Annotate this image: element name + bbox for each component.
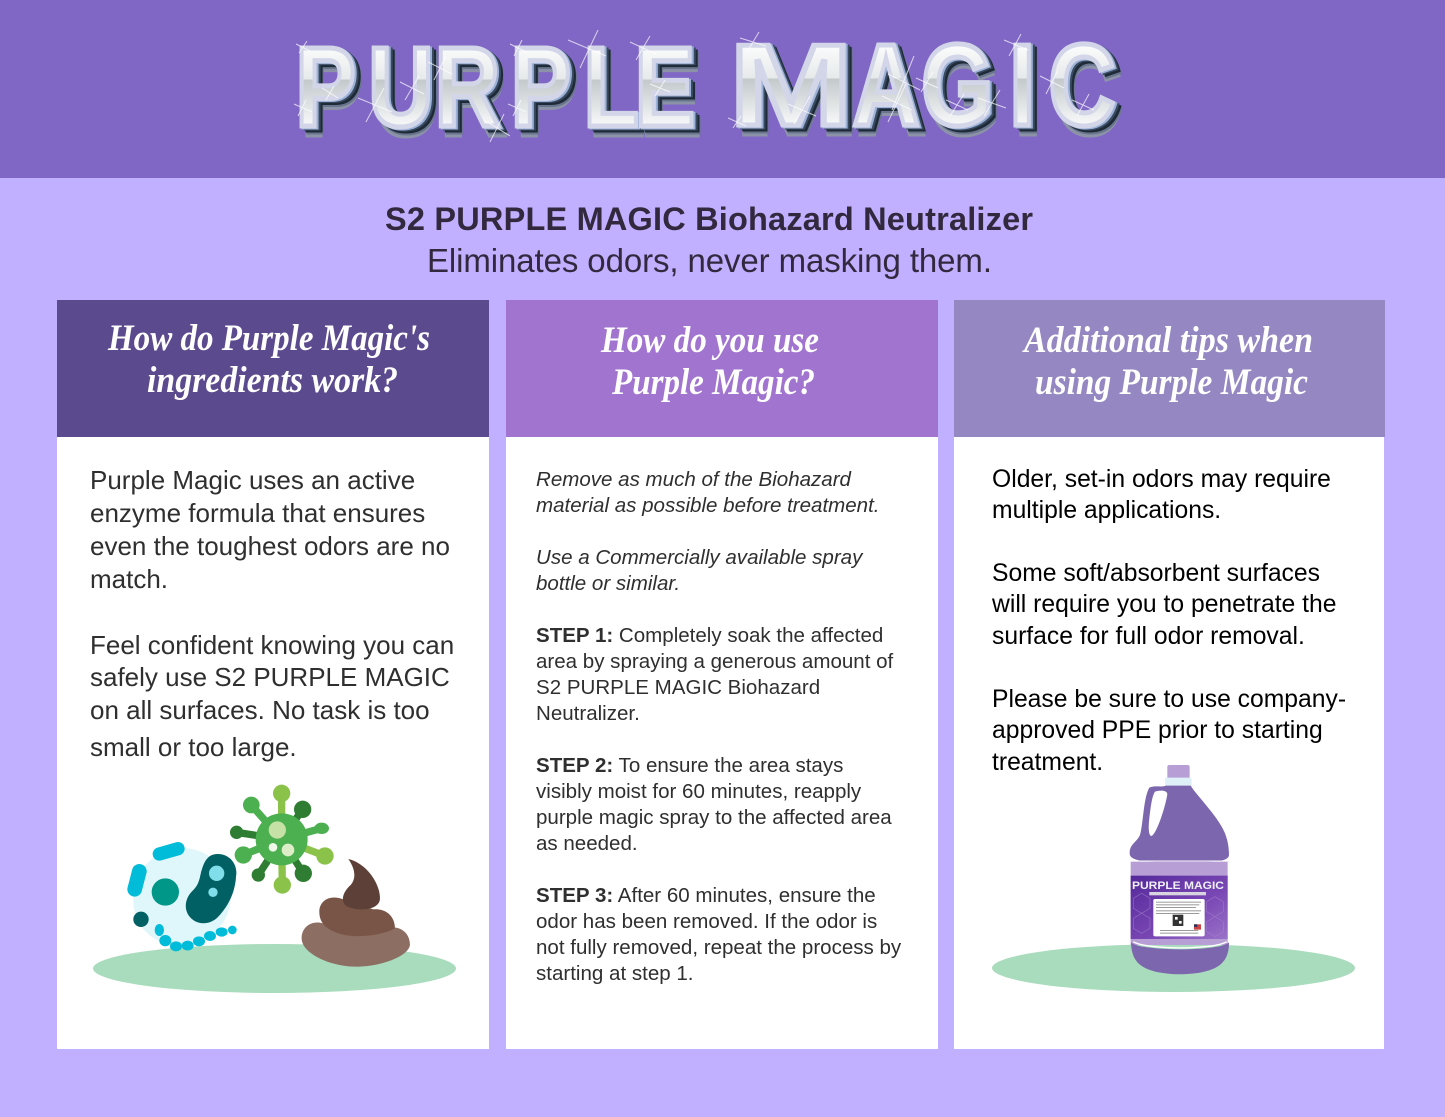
pre-treatment notes: Remove as much of the Biohazard xyxy=(536,468,852,491)
panel: additional tips xyxy=(954,300,1385,1049)
step 1: area by spraying a generous amount of xyxy=(536,650,894,673)
icon: spray jug xyxy=(1130,765,1229,974)
step 1: STEP 1: Completely soak the affected xyxy=(536,624,883,647)
tips text: will require you to penetrate the xyxy=(991,591,1336,618)
panel header xyxy=(506,300,938,437)
tips text: surface for full odor removal. xyxy=(992,623,1305,650)
body text: safely use S2 PURPLE MAGIC xyxy=(90,662,450,692)
tips text: Some soft/absorbent surfaces xyxy=(992,560,1320,587)
body text: small or too large. xyxy=(90,732,297,762)
title sparkles xyxy=(294,30,1094,142)
panel: how the ingredients work xyxy=(57,300,489,1049)
step 3 xyxy=(536,884,902,985)
panel header: Purple Magic? xyxy=(611,362,815,403)
icon: virus xyxy=(230,785,334,894)
body text: on all surfaces. No task is too xyxy=(90,695,430,725)
body text: match. xyxy=(90,564,168,594)
pre-treatment notes: bottle or similar. xyxy=(536,572,680,595)
icon: bacteria cell xyxy=(133,848,237,951)
panel header xyxy=(954,300,1385,437)
title: PURPLE MAGIC chrome lettering: M xyxy=(730,21,852,150)
step 3: not fully removed, repeat the process by xyxy=(536,936,902,959)
panel: how to use xyxy=(506,300,938,1049)
step 3: starting at step 1. xyxy=(536,962,694,985)
tips text: multiple applications. xyxy=(992,497,1221,524)
pre-treatment notes: Use a Commercially available spray xyxy=(536,546,864,569)
pre-treatment notes xyxy=(536,468,880,595)
panel header: using Purple Magic xyxy=(1035,362,1308,403)
tips text: Older, set-in odors may require xyxy=(992,466,1331,493)
step 1 xyxy=(536,624,894,725)
step 2: purple magic spray to the affected area xyxy=(536,806,892,829)
illustration: ground ellipse xyxy=(992,944,1355,992)
panel header: How do Purple Magic's xyxy=(107,318,430,359)
panel header: How do you use xyxy=(600,320,819,361)
icon: spray jug: PURPLE MAGIC xyxy=(1132,880,1224,892)
body text: enzyme formula that ensures xyxy=(90,498,425,528)
step 1: Neutralizer. xyxy=(536,702,640,725)
step 3: odor has been removed. If the odor is xyxy=(536,910,877,933)
step 2: STEP 2: To ensure the area stays xyxy=(536,754,843,777)
body text: Feel confident knowing you can xyxy=(90,630,454,660)
panel header: ingredients work? xyxy=(147,360,398,401)
body text: Purple Magic uses an active xyxy=(90,465,415,495)
icon: waste pile xyxy=(302,859,410,967)
title: PURPLE MAGIC chrome lettering: PURPLE xyxy=(296,23,695,150)
illustration: ground ellipse xyxy=(93,944,456,993)
step 2: as needed. xyxy=(536,832,638,855)
panel header: Additional tips when xyxy=(1022,320,1313,361)
subtitle block: Eliminates odors, never masking them. xyxy=(427,242,992,279)
step 3: STEP 3: After 60 minutes, ensure the xyxy=(536,884,876,907)
step 1: S2 PURPLE MAGIC Biohazard xyxy=(536,676,820,699)
top banner xyxy=(0,0,1445,178)
step 2 xyxy=(536,754,892,855)
tips text xyxy=(991,466,1346,776)
subtitle block: S2 PURPLE MAGIC Biohazard Neutralizer xyxy=(385,201,1033,237)
subtitle block xyxy=(385,201,1033,279)
tips text: Please be sure to use company- xyxy=(992,686,1346,713)
title: PURPLE MAGIC chrome lettering xyxy=(296,21,1116,150)
pre-treatment notes: material as possible before treatment. xyxy=(536,494,880,517)
panel header xyxy=(57,300,489,437)
step 2: visibly moist for 60 minutes, reapply xyxy=(536,780,862,803)
tips text: approved PPE prior to starting xyxy=(992,717,1323,744)
body text: even the toughest odors are no xyxy=(90,531,450,561)
title: PURPLE MAGIC chrome lettering: AGIC xyxy=(852,21,1116,150)
tips text: treatment. xyxy=(992,749,1103,776)
body text xyxy=(90,465,454,762)
